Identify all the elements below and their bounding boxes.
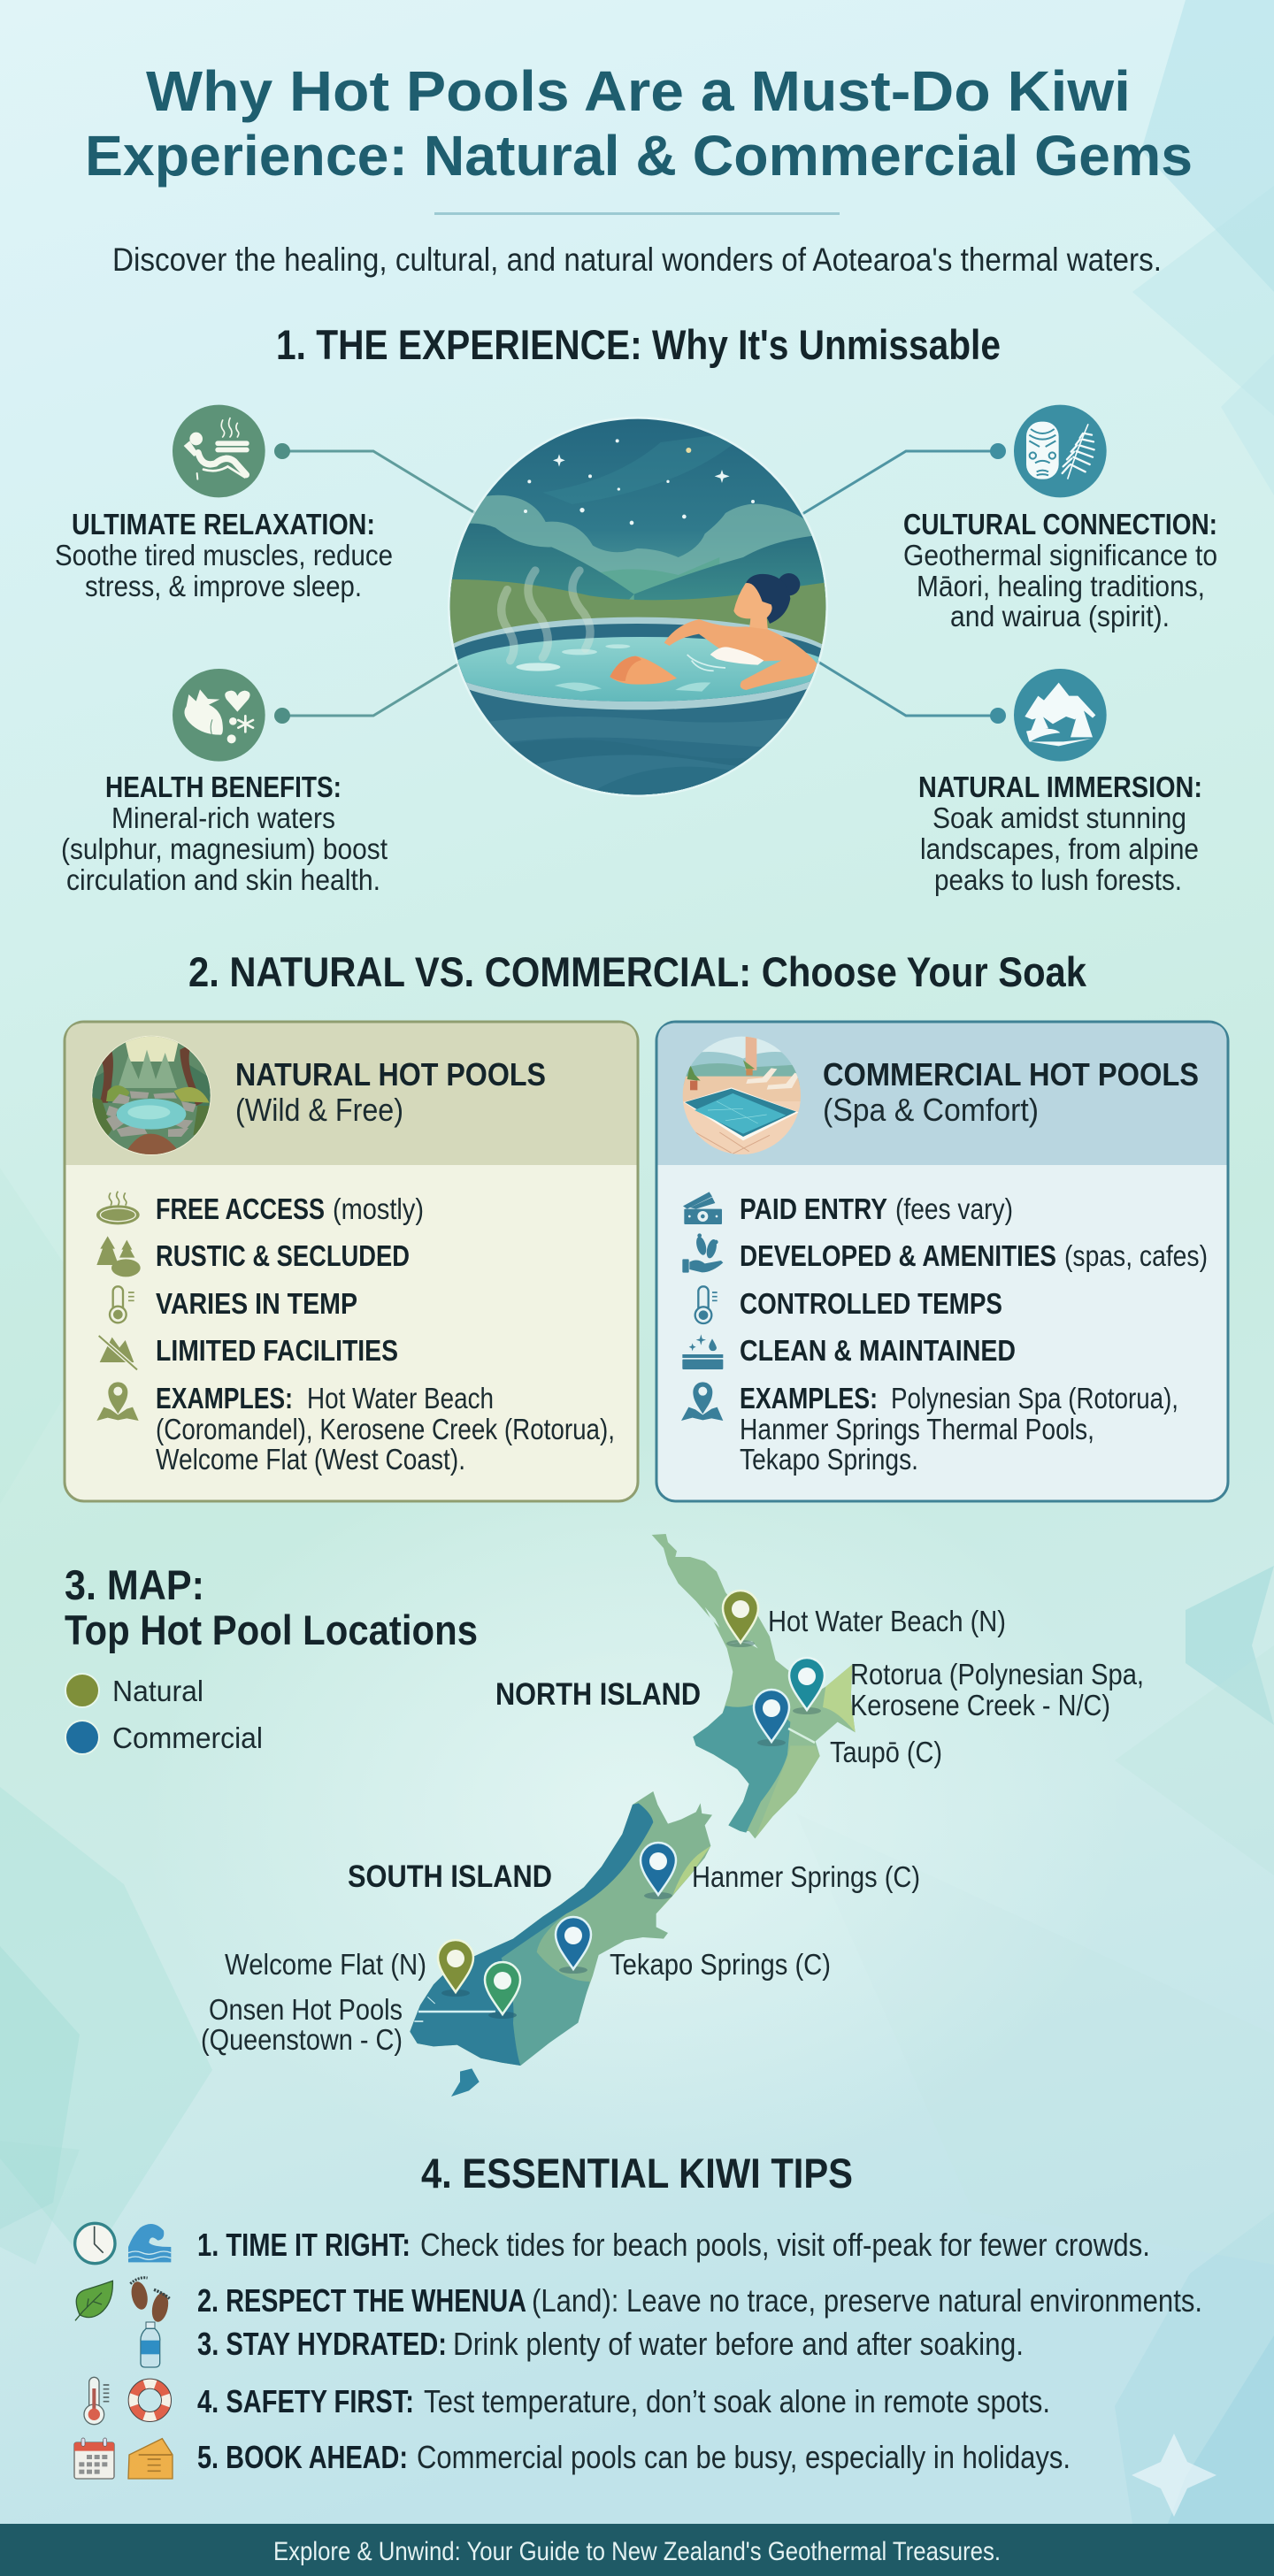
icons: thermometer and lifebuoy [84,2377,166,2425]
panel heading: natural [235,1056,546,1128]
icon: trees and rock [96,1236,141,1276]
text block: natural immersion: NATURAL IMMERSION: [918,770,1202,803]
tip 5: 5. BOOK AHEAD: [197,2439,408,2475]
text block: cultural connection [903,508,1217,632]
title: Experience: Natural & Commercial Gems [85,124,1193,188]
tip 5: Commercial pools can be busy, especially in holidays. [417,2439,1071,2475]
tip 1: Check tides for beach pools, visit off-peak for fewer crowds. [420,2227,1150,2263]
list: natural features [156,1192,615,1476]
icon: natural immersion [1014,669,1107,762]
pin: Hot Water Beach [723,1591,758,1647]
pin: Welcome Flat [438,1940,473,1997]
leader lines [418,1729,815,2012]
text block: health benefits: Mineral-rich waters [111,801,335,834]
icon: thermometer [110,1286,134,1322]
heading: section 3 [65,1561,478,1653]
text block: natural immersion: landscapes, from alpine [920,832,1199,865]
icon: map pin [96,1382,139,1421]
labels: map locations: Tekapo Springs (C) [610,1948,831,1981]
list: natural features: (Coromandel), Kerosene Creek (Rotorua), [156,1413,615,1445]
icons: calendar and ticket [74,2438,173,2479]
footer [0,2524,1274,2576]
text block: health benefits: circulation and skin health. [66,863,380,896]
tip 4: 4. SAFETY FIRST: [197,2383,414,2419]
legend: Commercial [112,1721,263,1754]
heading: section 3: 3. MAP: [65,1561,204,1608]
tip 2: 2. RESPECT THE WHENUA [197,2282,526,2319]
text block: cultural connection: CULTURAL CONNECTION: [903,508,1217,540]
text block: natural immersion [918,770,1202,896]
list: commercial features: CLEAN & MAINTAINED [740,1334,1016,1367]
list: natural features: (mostly) [333,1192,424,1225]
list: commercial features: Polynesian Spa (Rotorua), [891,1382,1178,1414]
labels: islands: SOUTH ISLAND [348,1859,552,1894]
icons: clock and wave [75,2223,171,2264]
pin: Tekapo Springs [556,1917,591,1974]
text block: natural immersion: Soak amidst stunning [932,801,1186,834]
tip 5 [197,2439,1071,2475]
tip 3 [197,2326,1024,2362]
pin: Onsen Hot Pools [485,1962,520,2019]
panel: natural hot pools [65,1022,638,1501]
labels: map locations: Hot Water Beach (N) [768,1605,1006,1637]
panel heading: natural: NATURAL HOT POOLS [235,1056,546,1092]
legend: Natural [112,1675,203,1707]
icon: clean pool [682,1334,723,1369]
list: natural features: Welcome Flat (West Coast). [156,1443,465,1476]
list: natural features: Hot Water Beach [307,1382,494,1414]
labels: map locations: Hanmer Springs (C) [692,1860,920,1893]
text block: ultimate relaxation: stress, & improve sleep. [85,570,362,602]
text block: ultimate relaxation [55,508,393,602]
text block: health benefits [61,770,388,896]
tip 3: Drink plenty of water before and after soaking. [453,2326,1024,2362]
icon: sparkle [1132,2434,1216,2517]
list: commercial features: CONTROLLED TEMPS [740,1287,1002,1320]
icon: hand with feet [682,1233,723,1273]
illustration: woman in hot pool [434,413,840,802]
steam [502,571,590,661]
list: commercial features: Hanmer Springs Thermal Pools, [740,1413,1094,1445]
image: forest pool [91,1035,212,1156]
labels: map locations: (Queenstown - C) [201,2023,403,2056]
icon: limited facilities [99,1336,137,1369]
subtitle: Discover the healing, cultural, and natural wonders of Aotearoa's thermal waters. [112,242,1162,278]
labels: map locations: Onsen Hot Pools [209,1993,403,2026]
footer: Explore & Unwind: Your Guide to New Zealand's Geothermal Treasures. [273,2537,1001,2566]
icon: relaxation [173,405,265,497]
icon: steaming pool [96,1192,140,1224]
panel: commercial hot pools [656,1022,1228,1501]
list: commercial features: Tekapo Springs. [740,1443,918,1476]
text block: health benefits: (sulphur, magnesium) boost [61,832,388,865]
heading: section 2: 2. NATURAL VS. COMMERCIAL: Choose Your Soak [188,948,1087,995]
clouds [453,495,825,580]
list: commercial features: (fees vary) [895,1192,1013,1225]
heading: section 3: Top Hot Pool Locations [65,1606,478,1653]
text block: cultural connection: and wairua (spirit). [950,600,1170,632]
list: commercial features: (spas, cafes) [1064,1239,1208,1272]
tip 1 [197,2227,1150,2263]
tip 2 [197,2282,1202,2319]
labels: map locations: Taupō (C) [830,1736,942,1768]
stars [524,439,755,525]
icon: commercial map pin [681,1382,723,1421]
text block: health benefits: HEALTH BENEFITS: [105,770,342,803]
woman [610,573,817,690]
image: spa pool [681,1035,802,1157]
title [85,59,1193,188]
map: North Island [652,1534,856,1838]
labels: map locations: Kerosene Creek - N/C) [850,1689,1110,1721]
text block: natural immersion: peaks to lush forests. [934,863,1182,896]
tip 3: 3. STAY HYDRATED: [197,2326,447,2362]
pin: Rotorua [789,1658,825,1714]
list: natural features: FREE ACCESS [156,1192,325,1225]
pin: Taupo [754,1690,789,1746]
labels: map locations [201,1605,1144,2056]
panel heading: commercial: (Spa & Comfort) [823,1092,1039,1128]
icon: money [683,1192,722,1224]
text block: ultimate relaxation: Soothe tired muscles, reduce [55,539,393,571]
text block: cultural connection: Geothermal significance to [903,539,1217,571]
heading: section 4: 4. ESSENTIAL KIWI TIPS [421,2150,853,2196]
list: commercial features: EXAMPLES: [740,1382,878,1414]
list: commercial features [740,1192,1208,1476]
icon: cultural [1014,405,1107,497]
map: South Island [410,1791,712,2097]
legend [65,1674,263,1754]
panel heading: commercial [823,1056,1199,1128]
list: natural features: EXAMPLES: [156,1382,293,1414]
icon: controlled thermometer [695,1286,718,1323]
icons: leaf and footprints [75,2278,171,2323]
title: Why Hot Pools Are a Must-Do Kiwi [146,59,1131,123]
panel heading: natural: (Wild & Free) [235,1092,403,1128]
labels: islands: NORTH ISLAND [495,1677,701,1712]
list: commercial features: PAID ENTRY [740,1192,887,1225]
list: natural features: VARIES IN TEMP [156,1287,357,1320]
list: natural features: RUSTIC & SECLUDED [156,1239,410,1272]
heading: section 1: 1. THE EXPERIENCE: Why It's Unmissable [276,321,1001,368]
panel heading: commercial: COMMERCIAL HOT POOLS [823,1056,1199,1092]
text block: cultural connection: Māori, healing traditions, [917,570,1205,602]
labels: map locations: Rotorua (Polynesian Spa, [850,1658,1144,1690]
tip 4: Test temperature, don’t soak alone in remote spots. [424,2383,1050,2419]
tip 4 [197,2383,1050,2419]
icon: water bottle [141,2322,160,2367]
labels: islands [348,1677,701,1894]
tip 1: 1. TIME IT RIGHT: [197,2227,411,2263]
icon: health [173,669,265,762]
labels: map locations: Welcome Flat (N) [225,1948,426,1981]
tub [458,663,817,794]
connector lines [274,443,1006,724]
list: commercial features: DEVELOPED & AMENITIES [740,1239,1056,1272]
list: natural features: LIMITED FACILITIES [156,1334,398,1367]
text block: ultimate relaxation: ULTIMATE RELAXATION: [72,508,375,540]
pin: Hanmer Springs [641,1843,676,1899]
